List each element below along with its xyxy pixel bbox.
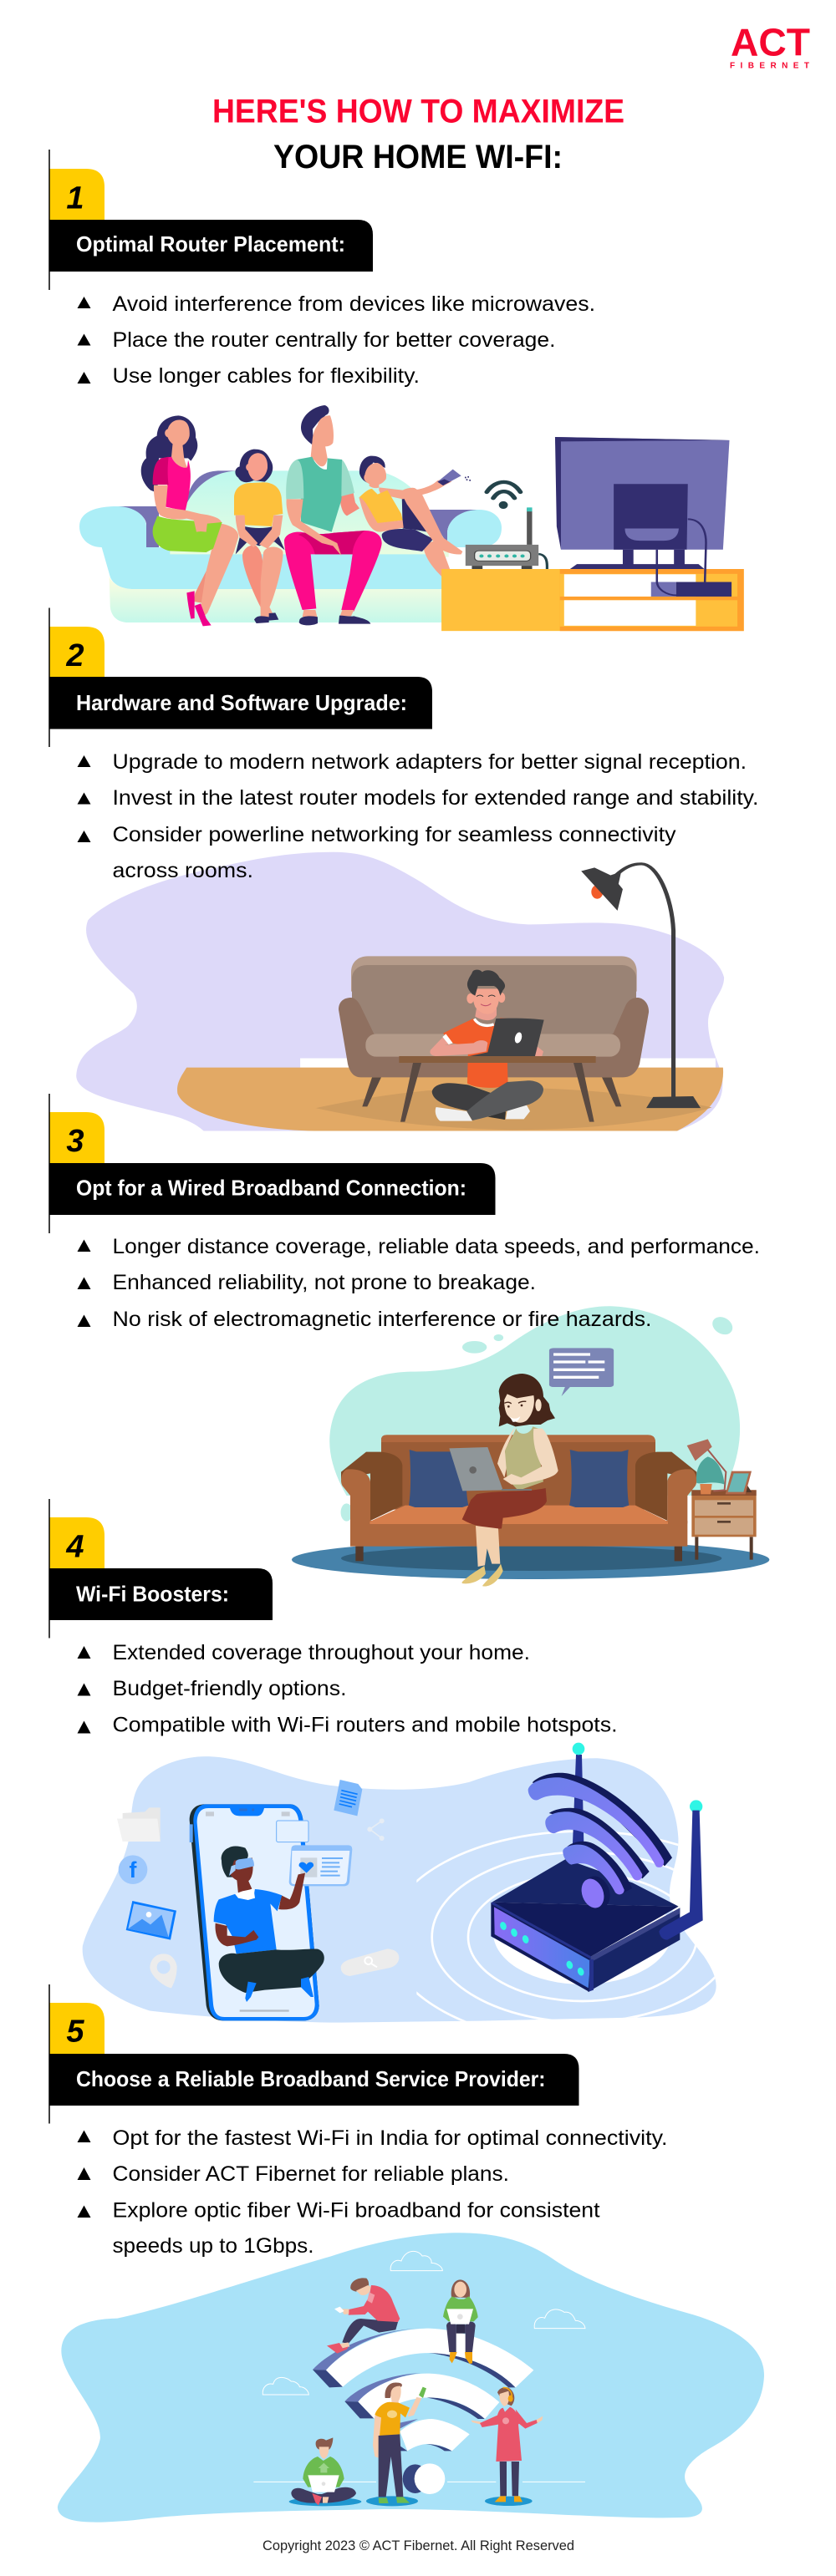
sofa and family <box>79 405 502 626</box>
bullet list: Compatible with Wi-Fi routers and mobile hotspots. <box>112 1713 617 1736</box>
title: YOUR HOME WI-FI: <box>273 139 563 175</box>
phone with person and floating icons <box>117 1780 399 2020</box>
bullet list: across rooms. <box>112 859 253 882</box>
icon: wifi signal <box>487 482 520 507</box>
person with phone on arc <box>327 2278 400 2354</box>
rug <box>292 1540 769 1579</box>
bullet list: Upgrade to modern network adapters for better signal reception. <box>112 750 747 774</box>
background blob and speech bubble <box>329 1306 740 1522</box>
section 4: wi-fi boosters <box>50 1517 716 2023</box>
bullet list: Use longer cables for flexibility. <box>112 364 420 388</box>
man <box>284 405 382 625</box>
man with laptop <box>399 970 596 1122</box>
bullet list: Consider powerline networking for seamless connectivity <box>112 823 676 846</box>
tab: number 1: 1 <box>66 180 84 216</box>
clouds and ground line <box>253 2251 585 2482</box>
illustration: people around wifi symbol <box>58 2233 764 2523</box>
floating app icons: f <box>130 1857 137 1882</box>
tab: number 5: 5 <box>66 2014 84 2049</box>
logo: ACT Fibernet: FIBERNET <box>730 62 809 71</box>
floating app icons <box>117 1780 399 1988</box>
illustration: family on sofa with router and TV <box>79 405 744 631</box>
section 2: hardware and software upgrade <box>49 627 759 1131</box>
bullet list: speeds up to 1Gbps. <box>112 2234 314 2258</box>
woman with laptop on arc <box>443 2279 478 2364</box>
heading bar: optimal router placement <box>49 220 373 272</box>
standing man with phone <box>373 2383 426 2503</box>
illustration: woman with laptop on sofa <box>292 1306 769 1587</box>
sofa <box>79 470 502 622</box>
bullet list: No risk of electromagnetic interference or fire hazards. <box>112 1308 652 1331</box>
bullet list: Place the router centrally for better coverage. <box>112 328 555 352</box>
logo: ACT Fibernet: ACT <box>731 21 810 64</box>
tab: number 2 <box>49 627 104 677</box>
tab: number 3 <box>49 1112 104 1163</box>
background blob <box>83 1756 716 2023</box>
app windows <box>277 1821 352 1886</box>
router with antennas and wifi arcs <box>491 1743 703 1992</box>
heading bar: hardware and software upgrade: Hardware and Software Upgrade: <box>76 690 407 715</box>
woman <box>141 415 238 626</box>
illustration: man with laptop on sofa <box>76 852 724 1131</box>
heading bar: wi-fi boosters: Wi-Fi Boosters: <box>76 1581 229 1606</box>
heading bar: hardware and software upgrade <box>49 677 432 729</box>
heading bar: wired broadband connection <box>49 1163 495 1215</box>
signal rings <box>416 1830 716 2021</box>
bullet list <box>77 2126 667 2258</box>
title <box>212 94 624 175</box>
section 3: wired broadband connection <box>49 1112 769 1587</box>
bullet list <box>77 1235 760 1331</box>
heading bar: reliable broadband provider: Choose a Reliable Broadband Service Provider: <box>76 2066 545 2091</box>
heading bar: reliable broadband provider <box>49 2054 579 2106</box>
heading bar: wired broadband connection: Opt for a Wired Broadband Connection: <box>76 1175 466 1200</box>
sofa <box>339 956 649 1106</box>
bullet list: Avoid interference from devices like microwaves. <box>112 292 595 316</box>
TV unit <box>441 519 744 631</box>
bullet list: Longer distance coverage, reliable data speeds, and performance. <box>112 1235 760 1258</box>
boy with remote <box>359 456 471 577</box>
bullet list: Enhanced reliability, not prone to breakage. <box>112 1271 536 1294</box>
woman with headphones <box>471 2387 543 2502</box>
seated man with laptop <box>291 2437 356 2505</box>
router, TV and cabinet <box>441 437 744 631</box>
woman with laptop <box>449 1374 558 1587</box>
phone <box>190 1804 319 2020</box>
bullet list <box>77 1641 617 1736</box>
sofa and man <box>339 956 649 1122</box>
tab: number 1 <box>49 169 104 220</box>
router <box>466 507 547 569</box>
sofa <box>341 1435 696 1561</box>
floor lamp <box>581 864 701 1108</box>
bullet list: Explore optic fiber Wi-Fi broadband for consistent <box>112 2199 600 2223</box>
bullet list: Consider ACT Fibernet for reliable plans. <box>112 2162 509 2186</box>
sofa, woman, rug and nightstand <box>292 1374 769 1587</box>
section 5: reliable broadband provider <box>49 2003 764 2523</box>
bullet list <box>77 750 759 882</box>
girl <box>234 450 285 623</box>
tab: number 3: 3 <box>66 1124 84 1159</box>
nightstand with plant, lamp and photo <box>687 1439 757 1560</box>
bullet list: Extended coverage throughout your home. <box>112 1641 530 1664</box>
tab: number 2: 2 <box>65 638 84 673</box>
title: HERE'S HOW TO MAXIMIZE <box>212 94 624 130</box>
heading bar: wi-fi boosters <box>49 1568 273 1620</box>
tab: number 4: 4 <box>65 1529 84 1564</box>
tab: number 4 <box>49 1517 104 1568</box>
copyright footer: Copyright 2023 © ACT Fibernet. All Right Reserved <box>263 2538 574 2553</box>
person with VR headset <box>214 1847 324 2002</box>
bullet list: Budget-friendly options. <box>112 1677 346 1700</box>
television <box>555 437 730 569</box>
tab: number 5 <box>49 2003 104 2054</box>
bullet list <box>77 292 595 388</box>
background blob, wall and floor <box>76 852 724 1131</box>
wifi symbol <box>313 2329 533 2494</box>
illustration: phone and router <box>82 1743 716 2023</box>
wifi symbol and people <box>253 2251 585 2506</box>
background blob <box>58 2233 764 2523</box>
ground shadows <box>289 2496 533 2506</box>
heading bar: optimal router placement: Optimal Router Placement: <box>76 231 345 257</box>
bullet list: Invest in the latest router models for extended range and stability. <box>112 786 759 810</box>
section 1: optimal router placement <box>49 169 744 631</box>
bullet list: Opt for the fastest Wi-Fi in India for optimal connectivity. <box>112 2126 667 2150</box>
